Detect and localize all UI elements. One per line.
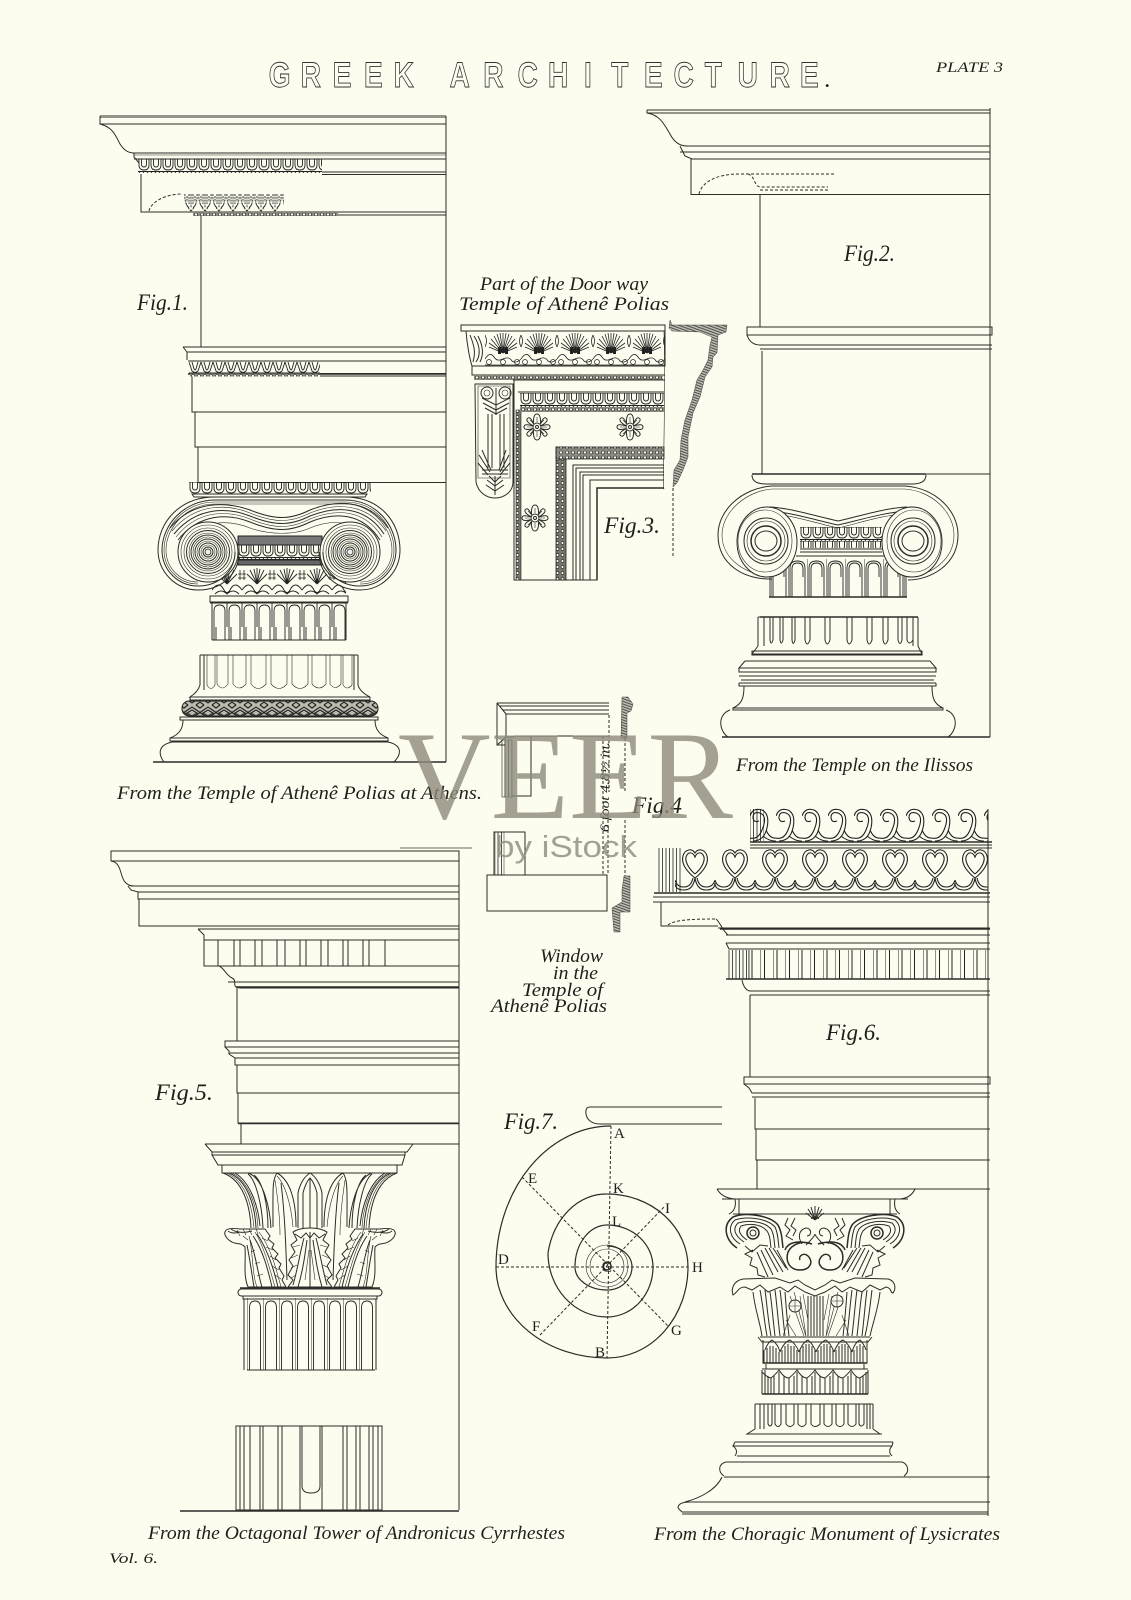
point letters: F (532, 1319, 540, 1335)
rosettes (522, 414, 643, 531)
column base (721, 617, 990, 737)
label: Fig.7. (503, 1109, 558, 1134)
caption: Temple of (522, 980, 606, 1001)
watermark: VEER (398, 707, 733, 846)
label: Fig.2. (843, 241, 895, 266)
construction axes (496, 1126, 688, 1358)
frieze and architrave (205, 1041, 459, 1144)
caption: Window (540, 946, 603, 967)
window elevation (487, 703, 609, 911)
dimension: 6 foot 4.8½ in. (597, 742, 612, 832)
caption (489, 946, 607, 1017)
Ionic capital (718, 474, 958, 597)
caption: Part of the Door way (479, 274, 649, 295)
caption: Athenê Polias (489, 996, 607, 1017)
caption: Temple of Athenê Polias (459, 294, 669, 315)
point letters: K (613, 1181, 624, 1197)
column base (678, 1404, 990, 1514)
abacus (586, 1107, 722, 1124)
figure 5: Tower of the Winds order (111, 851, 565, 1544)
frieze and architrave (717, 1077, 990, 1189)
point letters: L (612, 1214, 621, 1230)
door frame (513, 331, 665, 580)
point letters: I (665, 1201, 670, 1217)
console bracket (475, 384, 513, 498)
Corinthian capital (717, 1189, 915, 1394)
cresting (656, 808, 992, 893)
point letters: H (692, 1260, 703, 1276)
label: Fig.1. (136, 290, 188, 315)
caption: From the Octagonal Tower of Andronicus Cyrrhestes (147, 1523, 565, 1544)
capital (205, 1144, 413, 1370)
entablature (111, 851, 459, 1510)
figure 7: volute construction diagram (496, 1107, 722, 1361)
caption: From the Choragic Monument of Lysicrates (653, 1524, 1000, 1545)
frieze and architrave (183, 216, 446, 482)
point letters: A (614, 1126, 625, 1142)
figure 1: Ionic order, Temple of Athene Polias (100, 116, 482, 804)
point letters: G (671, 1323, 682, 1339)
column base (153, 655, 446, 762)
plate number: PLATE 3 (935, 60, 1003, 76)
caption: From the Temple of Athenê Polias at Athens. (116, 783, 482, 804)
point letters: C (602, 1260, 612, 1276)
title: GREEK ARCHITECTURE (269, 55, 819, 95)
point letters: B (595, 1345, 605, 1361)
figure 6: Choragic Monument of Lysicrates (653, 808, 1000, 1545)
entablature (653, 809, 990, 1516)
caption (459, 274, 669, 315)
anthemion cornice (461, 325, 665, 380)
section profile (669, 320, 727, 558)
label: Fig.3. (603, 513, 660, 538)
section profile (612, 697, 633, 932)
point letters: E (528, 1171, 537, 1187)
figure 4: window (487, 697, 682, 1017)
column shaft (180, 1426, 459, 1511)
point letters (498, 1126, 703, 1361)
label: Fig.4 (631, 793, 682, 818)
caption: From the Temple on the Ilissos (735, 755, 973, 776)
volume number: Vol. 6. (109, 1551, 158, 1567)
Ionic capital (158, 482, 400, 640)
label: Fig.6. (825, 1020, 881, 1045)
entablature (647, 108, 992, 737)
label: Fig.5. (154, 1080, 213, 1105)
entablature (100, 116, 446, 762)
caption: in the (553, 963, 598, 984)
figure 3: door way (459, 274, 727, 580)
title: . (825, 71, 830, 91)
watermark: by iStock (495, 829, 638, 864)
figure 2: Ionic order, Temple on the Ilissos (647, 108, 992, 776)
spiral (496, 1126, 688, 1358)
point letters: D (498, 1252, 509, 1268)
